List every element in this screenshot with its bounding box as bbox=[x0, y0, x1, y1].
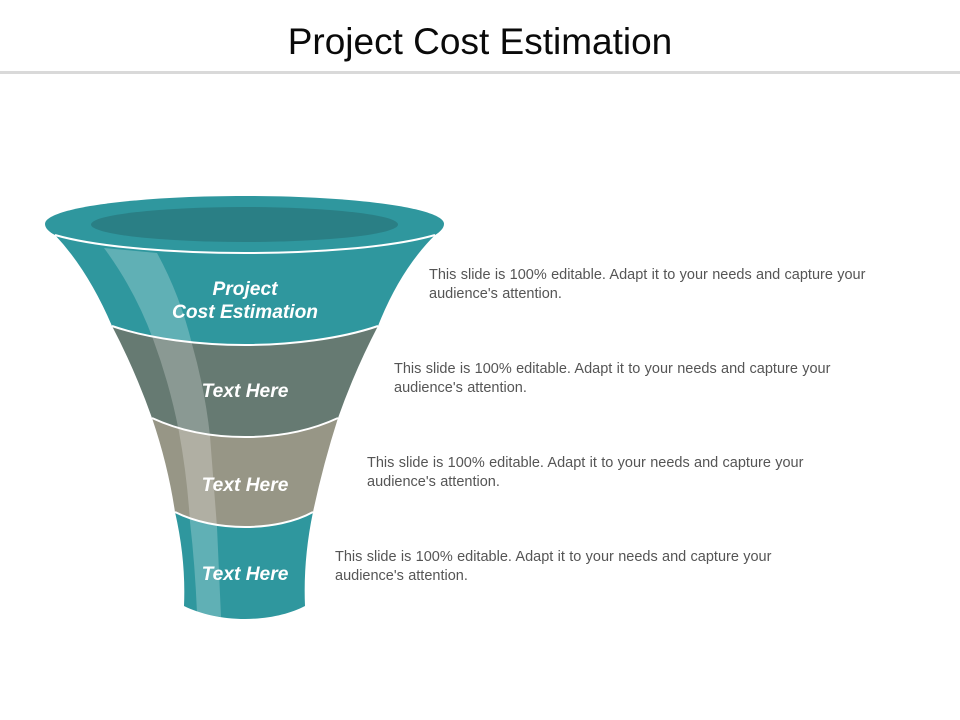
description 3: audience's attention. bbox=[367, 474, 500, 490]
funnel rim bbox=[45, 196, 444, 253]
description 1: This slide is 100% editable. Adapt it to your needs and capture your bbox=[429, 267, 865, 283]
description 4 bbox=[335, 549, 772, 584]
description 2: This slide is 100% editable. Adapt it to your needs and capture your bbox=[394, 361, 830, 377]
description 4: This slide is 100% editable. Adapt it to your needs and capture your bbox=[335, 549, 771, 565]
description 3 bbox=[367, 455, 804, 490]
funnel band 1: teal top: Cost Estimation bbox=[172, 302, 318, 323]
title: Project Cost Estimation bbox=[288, 21, 672, 62]
funnel band 4: teal base bbox=[175, 512, 313, 619]
description 1: audience's attention. bbox=[429, 286, 562, 302]
description 3: This slide is 100% editable. Adapt it to your needs and capture your bbox=[367, 455, 803, 471]
funnel band 2: grey green bbox=[112, 326, 378, 437]
funnel band 3: khaki: Text Here bbox=[202, 475, 289, 496]
funnel band 4: teal base: Text Here bbox=[202, 564, 289, 585]
funnel band 1: teal top: Project bbox=[212, 279, 279, 300]
funnel band 2: grey green: Text Here bbox=[202, 381, 289, 402]
description 2: audience's attention. bbox=[394, 380, 527, 396]
description 4: audience's attention. bbox=[335, 568, 468, 584]
funnel opening bbox=[91, 207, 398, 242]
funnel band 1: teal top bbox=[55, 235, 435, 345]
title divider bbox=[0, 71, 960, 74]
funnel band 3: khaki bbox=[152, 418, 338, 527]
description 2 bbox=[394, 361, 830, 396]
description 1 bbox=[429, 267, 866, 302]
band separators bbox=[55, 235, 435, 527]
